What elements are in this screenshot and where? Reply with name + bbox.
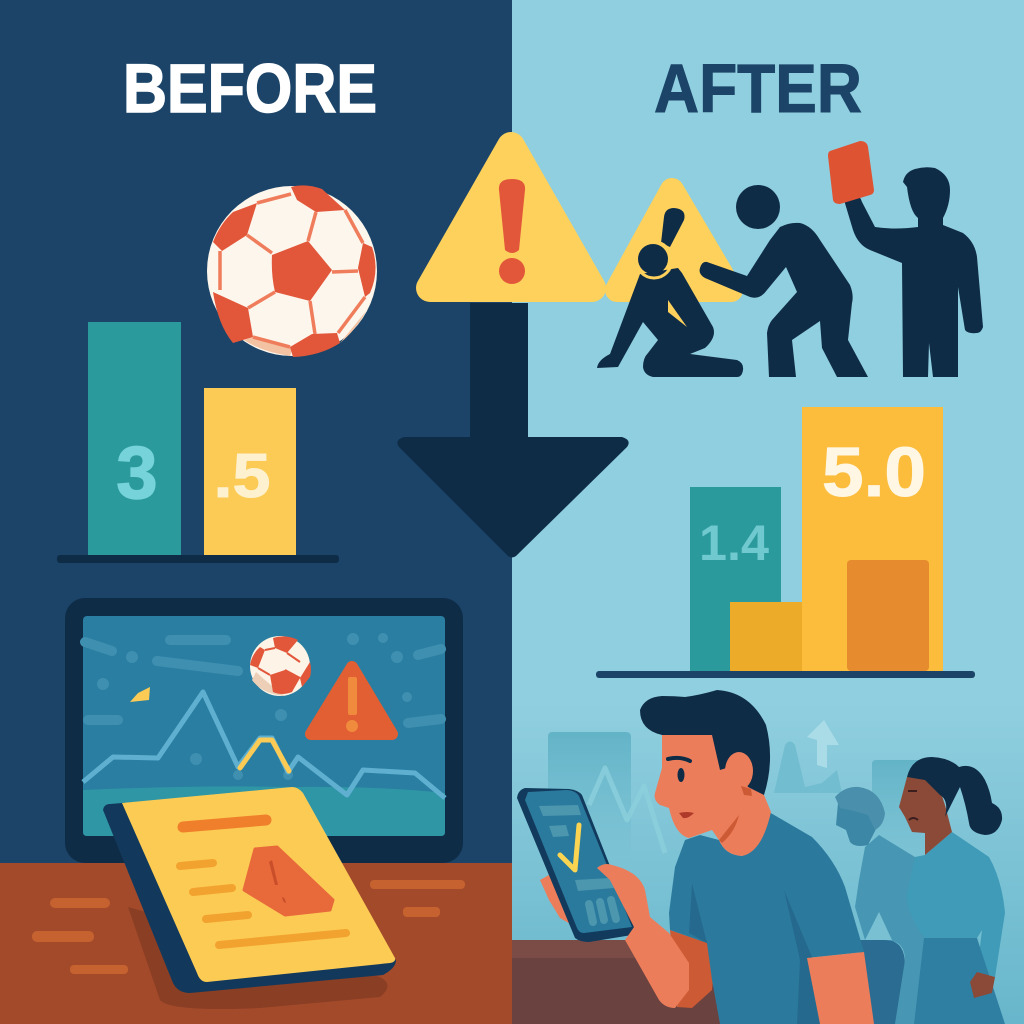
table surface: before — [0, 863, 512, 1024]
dress top — [907, 832, 1005, 977]
tall yellow bar — [802, 407, 943, 671]
shirt folds — [689, 883, 822, 1024]
bar chart: after — [596, 407, 975, 678]
figures: injury and referee — [597, 167, 983, 377]
icon: soccer ball — [207, 185, 377, 357]
smartphone with check — [517, 788, 635, 942]
kneeling player — [597, 242, 743, 377]
warning shape — [244, 847, 333, 915]
hand — [970, 972, 995, 998]
warning triangle small behind figures — [617, 190, 731, 290]
value 5.0: 5.0 — [822, 433, 926, 511]
dark forearm side — [670, 930, 714, 1008]
chair — [860, 940, 905, 1024]
monitor with dashboard — [65, 598, 463, 863]
hand and arm holding phone — [597, 864, 689, 1008]
bar chart: before — [57, 322, 339, 563]
skirt — [914, 938, 1005, 1024]
eye and brow — [668, 758, 690, 782]
inner orange bar — [847, 560, 929, 671]
facial features — [908, 791, 918, 820]
faded up arrow — [807, 720, 839, 768]
arrow: down — [397, 303, 629, 558]
table dashes — [32, 880, 465, 974]
background person with blue shirt — [835, 787, 935, 1024]
red card — [828, 141, 874, 204]
tablet with warning report — [103, 787, 396, 993]
foreground man — [640, 690, 874, 1024]
jaw shadow — [719, 815, 739, 843]
background scene — [512, 700, 1024, 1024]
line chart — [83, 692, 445, 798]
referee — [844, 167, 983, 377]
background woman — [899, 757, 1005, 1024]
desk after — [512, 940, 722, 1024]
exclamation on screen — [346, 677, 358, 732]
neck and head skin — [655, 735, 771, 856]
face and neck — [899, 775, 952, 855]
warning triangle on screen — [311, 667, 392, 734]
small orange bar — [730, 602, 804, 671]
tablet shadow — [128, 907, 388, 1009]
report lines — [180, 820, 346, 945]
mouth — [679, 812, 694, 818]
baseline — [57, 555, 339, 563]
mini ball — [250, 636, 311, 696]
warning triangle large — [430, 146, 592, 288]
ear shadow — [741, 786, 752, 796]
hair and ponytail — [907, 757, 1002, 835]
value 3: 3 — [116, 431, 158, 514]
baseline — [596, 671, 975, 678]
value .5: .5 — [214, 442, 270, 511]
helper player — [700, 185, 868, 377]
fingers behind phone — [540, 875, 572, 925]
heading: after: AFTER — [654, 50, 862, 127]
shirt — [669, 812, 864, 1024]
yellow bar — [204, 388, 296, 555]
hair — [640, 690, 770, 795]
ear — [725, 752, 753, 790]
value 1.4: 1.4 — [699, 515, 769, 571]
right arm — [807, 952, 874, 1024]
panel: before background — [0, 0, 512, 1024]
heading: before: BEFORE — [123, 50, 377, 127]
teal bar — [690, 487, 781, 671]
decorative dashes and dots — [85, 640, 441, 723]
panel: after background — [512, 0, 1024, 1024]
teal bar — [88, 322, 181, 555]
